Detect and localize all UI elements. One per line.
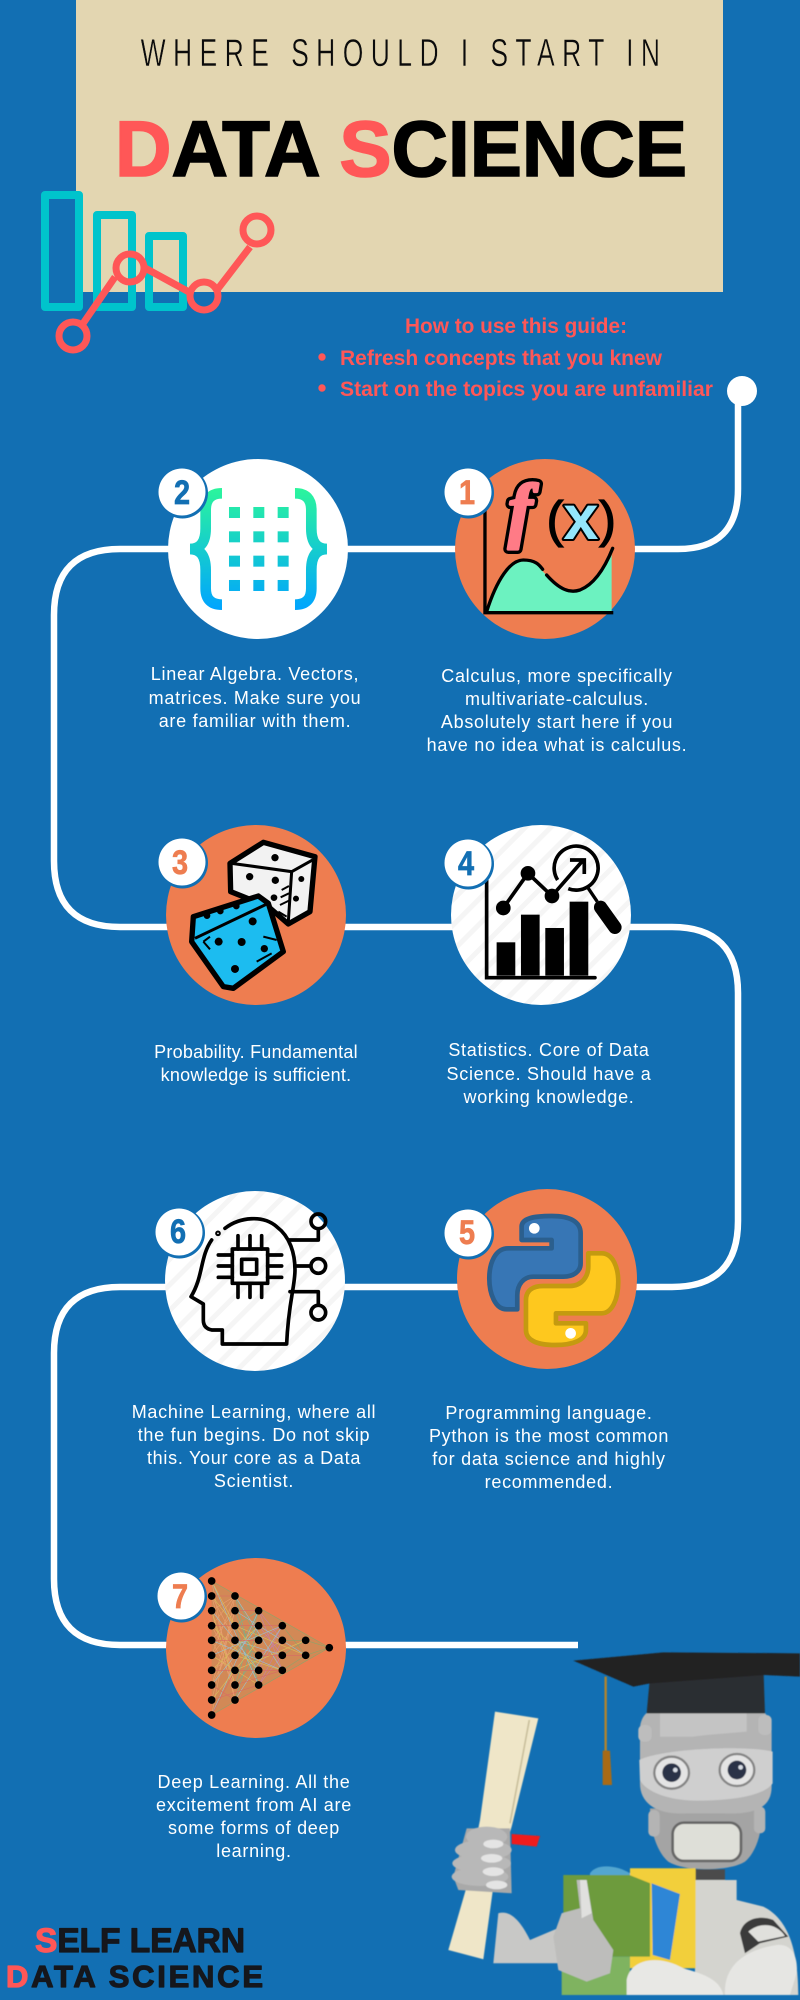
text: step 3: Probability. Fundamental [154,1042,358,1062]
badge 3: 3 [172,843,188,882]
text: step 2: are familiar with them. [159,711,351,731]
text: step 5: Programming language. [445,1403,653,1423]
text: step 2: matrices. Make sure you [149,688,361,708]
text: step 5: Python is the most common [429,1426,669,1446]
text: step 2 [149,664,361,731]
how to use guide: Refresh concepts that you knew [340,347,663,370]
step 1 circle: calculus [455,459,635,639]
step 7 circle: deep learning [166,1558,346,1738]
badge 4 [443,838,494,890]
footer logo: SELF LEARN [35,1922,245,1960]
how to use guide: Start on the topics you are unfamiliar [340,378,713,401]
icon: dice [192,842,315,988]
title line 1: WHERE SHOULD I START IN [141,32,667,75]
badge 2 [157,468,208,518]
step 4 circle: statistics [451,825,631,1005]
badge 4: 4 [458,844,474,883]
icon: matrix braces [190,493,327,605]
text: step 3: knowledge is sufficient. [161,1065,351,1085]
step 6 circle: machine learning [165,1191,345,1371]
text: step 3 [154,1042,358,1085]
text: step 1: Absolutely start here if you [441,712,673,732]
icon: chart logo [45,195,271,350]
icon: function graph: ( [547,492,564,548]
badge 6 [154,1208,205,1258]
text: step 2: Linear Algebra. Vectors, [151,664,359,684]
icon: function graph: f [508,470,538,549]
step 2 circle: linear algebra [168,459,348,639]
badge 7: 7 [172,1577,188,1616]
text: step 5: for data science and highly [432,1449,666,1469]
text: step 6: Machine Learning, where all [132,1402,376,1422]
footer logo [6,1922,263,1994]
text: step 1: multivariate-calculus. [465,689,649,709]
text: step 6 [132,1402,376,1491]
badge 1: 1 [459,473,475,512]
badge 5 [443,1208,494,1260]
badge 3 [157,838,208,888]
text: step 7 [156,1772,352,1861]
text: step 1: Calculus, more specifically [441,666,673,686]
how to use guide [318,315,713,401]
text: step 7: some forms of deep [168,1818,340,1838]
text: step 7: excitement from AI are [156,1795,352,1815]
text: step 7: learning. [216,1841,292,1861]
step 5 circle: python [457,1189,637,1369]
icon: function graph: ) [599,492,616,548]
icon: python logo [489,1216,618,1345]
text: step 4 [447,1040,652,1107]
icon: function graph: f [508,470,538,549]
text: step 6: Scientist. [214,1471,294,1491]
text: step 1: have no idea what is calculus. [427,735,687,755]
badge 7 [156,1572,207,1622]
icon: neural network [208,1577,333,1719]
text: step 4: Statistics. Core of Data [448,1040,650,1060]
icon: chart with magnifier [487,846,615,978]
text: step 5 [429,1403,669,1492]
icon: function graph: x [563,483,599,553]
icon: AI head [191,1214,326,1344]
footer logo: DATA SCIENCE [6,1959,263,1994]
title panel [76,0,723,292]
text: step 7: Deep Learning. All the [158,1772,350,1792]
badge 2: 2 [174,473,190,512]
title line 2: DATA SCIENCE [115,104,687,193]
badge 5: 5 [459,1213,475,1252]
illustration: graduate robot [448,1652,800,1995]
badge 1 [443,468,494,518]
text: step 4: Science. Should have a [447,1064,652,1084]
step 3 circle: probability [166,825,346,1005]
text: step 4: working knowledge. [462,1087,635,1107]
text: step 5: recommended. [485,1472,613,1492]
connector path [54,376,757,1645]
text: step 6: this. Your core as a Data [147,1448,361,1468]
how to use guide: How to use this guide: [405,315,627,338]
icon: function graph [485,470,616,613]
text: step 6: the fun begins. Do not skip [138,1425,370,1445]
icon: function graph: x [563,483,599,553]
badge 6: 6 [170,1212,186,1251]
text: step 1 [427,666,687,755]
